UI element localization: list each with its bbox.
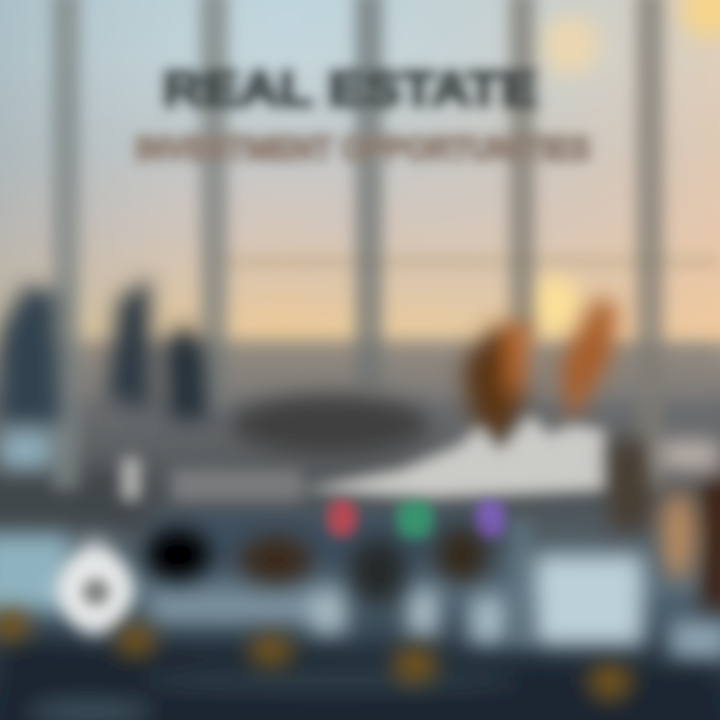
timeline base bbox=[0, 640, 720, 720]
area chart bbox=[122, 415, 608, 502]
title: REAL ESTATE bbox=[162, 61, 538, 117]
window mullions bbox=[52, 0, 664, 650]
skyline: left towers bbox=[0, 278, 208, 468]
subtitle: INVESTMENT OPPORTUNITIES bbox=[136, 130, 590, 168]
timeline markers bbox=[0, 609, 632, 700]
dark circle icons bbox=[146, 527, 488, 606]
right side: brown pillar bbox=[610, 440, 720, 610]
round badge icon bbox=[55, 535, 135, 642]
legend band behind markers bbox=[150, 515, 500, 570]
marker: green bbox=[397, 500, 433, 538]
marker: red bbox=[328, 500, 356, 536]
dark mound bbox=[230, 395, 430, 455]
marker: purple bbox=[476, 500, 504, 538]
light blue panels bbox=[150, 555, 720, 660]
skyline: orange trees bbox=[462, 298, 618, 450]
